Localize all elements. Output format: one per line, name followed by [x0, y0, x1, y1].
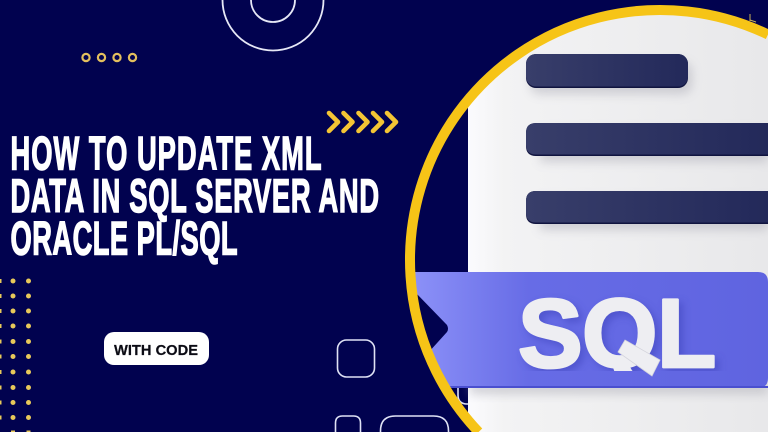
- ribbon notch: [417, 294, 448, 349]
- illustration: document with SQL ribbon: [400, 0, 768, 432]
- title: [10, 128, 379, 266]
- four small ring dots: [82, 54, 136, 61]
- Q tail: [618, 340, 660, 376]
- text bar 1: [526, 54, 692, 94]
- title: HOW TO UPDATE XML: [10, 128, 322, 181]
- button: with code: WITH CODE: [114, 343, 198, 359]
- button: with code: [104, 332, 209, 365]
- document sheet: [468, 0, 768, 432]
- title: ORACLE PL/SQL: [10, 213, 238, 266]
- text bar 2: [526, 123, 768, 162]
- dot grid: [0, 278, 31, 432]
- concentric circles decoration: [222, 0, 324, 50]
- small tick mark: [750, 14, 756, 22]
- SQL lettering: SQL: [518, 279, 716, 388]
- outlined rounded squares: [336, 340, 470, 432]
- title: DATA IN SQL SERVER AND: [10, 170, 379, 223]
- SQL ribbon: [400, 272, 768, 388]
- ribbon shadow: [470, 382, 768, 394]
- text bar 3: [526, 191, 768, 230]
- chevron arrows: [329, 113, 396, 131]
- yellow ring: [410, 10, 768, 432]
- SQL shadow: SQL: [522, 283, 720, 392]
